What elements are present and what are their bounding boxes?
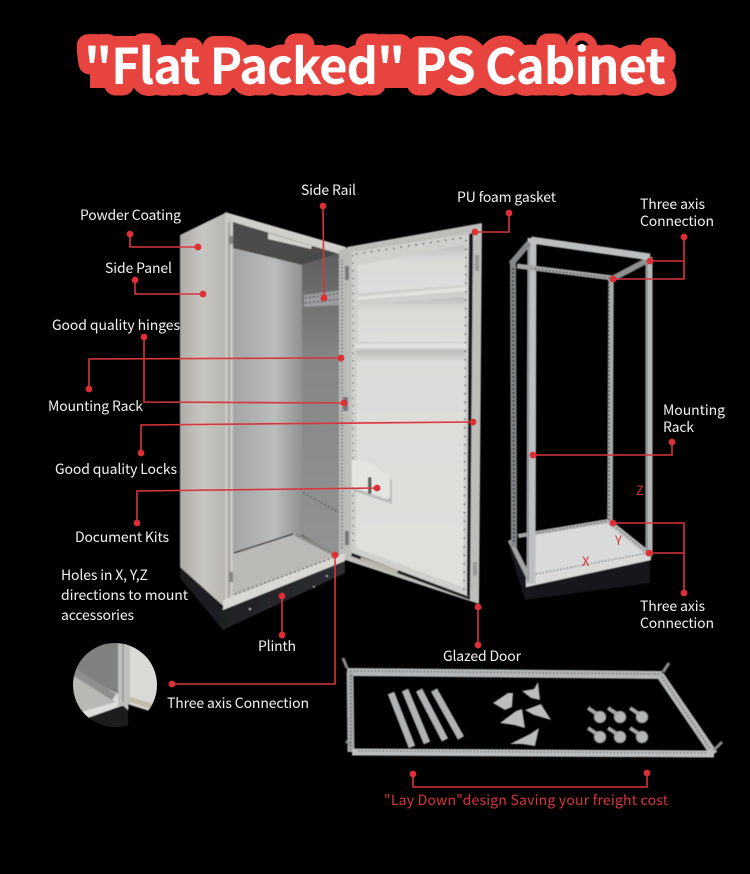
labels: Plinth: [258, 636, 296, 656]
rack plinth: [508, 545, 650, 600]
labels: Three axis: [640, 194, 705, 214]
inset: three axis connection detail: [73, 643, 157, 727]
labels: Side Rail: [301, 180, 356, 200]
axis letters: Y: [614, 530, 622, 549]
title: "Flat Packed" PS Cabinet: [84, 28, 666, 99]
labels: Glazed Door: [443, 646, 522, 666]
labels: Good quality hinges: [52, 315, 180, 335]
mounting rails: [391, 690, 461, 747]
axis letters: X: [582, 551, 590, 570]
callout: PU foam gasket: [472, 210, 512, 235]
cabinet interior: [233, 222, 345, 597]
callout: rack mounting: [530, 439, 675, 458]
callout lines: [86, 203, 687, 787]
labels: "Lay Down"design Saving your freight cost: [384, 790, 669, 810]
labels: Mounting: [663, 400, 725, 420]
labels: accessories: [61, 605, 134, 625]
labels: directions to mount: [61, 585, 189, 605]
plinth: [180, 560, 345, 630]
callout: lay down bracket: [410, 770, 650, 787]
labels: Connection: [640, 211, 714, 231]
rack frame: [508, 238, 651, 600]
axis letters: [582, 480, 644, 570]
rack columns: [513, 238, 649, 584]
callout: mounting rack: [86, 355, 344, 392]
callout: three axis top: [610, 234, 687, 282]
callout: side rail: [320, 203, 327, 301]
bolts: [588, 708, 648, 743]
callout: three axis bottom: [610, 520, 687, 596]
title: "Flat Packed" PS Cabinet: [84, 28, 666, 99]
callout: plinth: [279, 593, 285, 638]
door: [343, 223, 482, 604]
flat pack parts: [343, 658, 722, 754]
rack floor plate: [533, 520, 648, 580]
labels: Rack: [663, 417, 694, 437]
labels: [48, 180, 725, 810]
labels: Three axis: [640, 596, 705, 616]
document kit holder: [352, 460, 392, 504]
flat pack frame: [343, 658, 722, 754]
callout: side panel: [132, 277, 206, 297]
callout: three axis connection inset: [169, 552, 338, 687]
callout: good quality locks: [138, 419, 476, 456]
labels: Document Kits: [75, 527, 169, 547]
labels: PU foam gasket: [457, 187, 557, 207]
side panel: [180, 213, 225, 608]
callout: powder coating: [127, 231, 201, 250]
callout: document kits: [134, 485, 380, 526]
cabinet frame: [223, 212, 347, 610]
labels: Side Panel: [105, 258, 172, 278]
axis letters: Z: [636, 480, 644, 499]
cabinet photo: [180, 212, 482, 630]
callout: glazed door: [475, 604, 481, 648]
labels: Powder Coating: [80, 205, 181, 225]
rack top beams: [511, 240, 650, 279]
labels: Holes in X, Y,Z: [61, 565, 148, 585]
corner brackets: [493, 682, 551, 746]
labels: Connection: [640, 613, 714, 633]
labels: Good quality Locks: [55, 459, 177, 479]
labels: Mounting Rack: [48, 396, 143, 416]
labels: Three axis Connection: [167, 693, 309, 713]
rack base rails: [510, 521, 651, 587]
callout: good quality hinges: [141, 334, 347, 406]
